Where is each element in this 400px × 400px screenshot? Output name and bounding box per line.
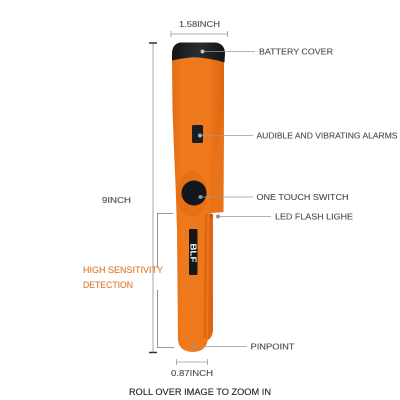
label: battery cover: BATTERY COVER (259, 46, 333, 56)
body shading (210, 95, 224, 213)
label: pinpoint (192, 342, 295, 352)
switch recess (177, 171, 207, 217)
label: LED flash light (216, 212, 353, 222)
body seam (205, 214, 206, 338)
callout: high sensitivity detection (83, 265, 163, 290)
alarm slot (192, 125, 203, 143)
dimension: height 9 inch: 9INCH (102, 195, 131, 205)
dimension: height 9 inch (102, 43, 157, 352)
callout: high sensitivity detection: DETECTION (83, 280, 133, 290)
dimension: top width 1.58 inch (171, 19, 228, 37)
battery cap (172, 42, 225, 62)
label: LED flash light: LED FLASH LIGHE (275, 212, 353, 222)
callout: high sensitivity detection: HIGH SENSITIVITY (83, 265, 163, 275)
label: one touch switch: ONE TOUCH SWITCH (256, 192, 348, 202)
dimension: bottom width 0.87 inch (171, 359, 213, 378)
product: pinpointer (172, 42, 225, 352)
dimension: bottom width 0.87 inch: 0.87INCH (171, 368, 213, 378)
fin: rear grip (204, 212, 213, 340)
label: audible and vibrating alarms: AUDIBLE AND VIBRATING ALARMS (256, 130, 398, 140)
switch button (182, 180, 206, 206)
bracket: high sensitivity region (158, 214, 174, 348)
body (172, 58, 224, 352)
logo plate (189, 229, 198, 275)
LED tip (209, 214, 213, 218)
caption: roll over image: ROLL OVER IMAGE TO ZOOM IN (129, 387, 271, 397)
label: one touch switch (198, 192, 348, 202)
logo text: BLF (188, 244, 198, 263)
dimension: top width 1.58 inch: 1.58INCH (179, 19, 220, 29)
label: pinpoint: PINPOINT (250, 342, 295, 352)
label: battery cover (200, 46, 333, 56)
